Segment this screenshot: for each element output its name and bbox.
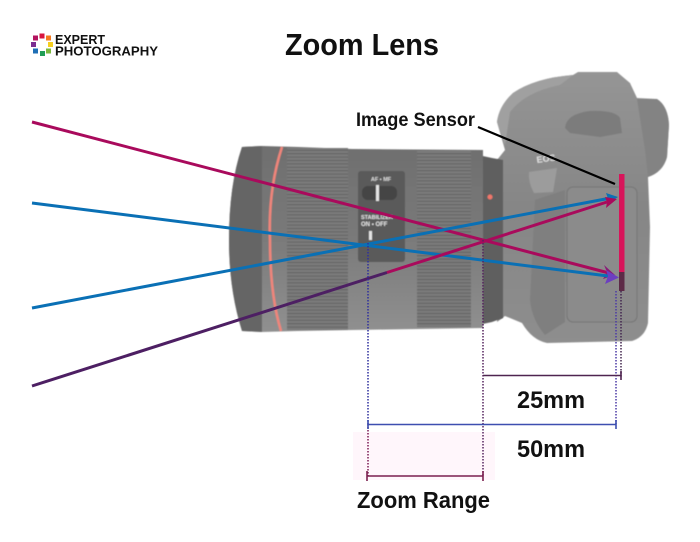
label: image sensor: Image Sensor — [356, 109, 475, 131]
camera door panel — [567, 187, 637, 322]
logo wordmark: EXPERT — [55, 33, 105, 47]
dimension: zoom range: Zoom Range — [357, 487, 490, 513]
camera body — [497, 72, 669, 343]
lens indicator dot — [488, 194, 492, 200]
camera top highlight — [497, 75, 573, 145]
ray: lower blue — [32, 193, 618, 308]
lens switch panel: ON ▪ OFF — [361, 222, 388, 228]
image sensor bar — [619, 174, 624, 291]
lens switch panel: AF ▪ MF — [371, 177, 392, 183]
ray: upper magenta — [32, 122, 615, 279]
lens zoom ring ribs — [287, 148, 348, 330]
camera eyecup — [637, 99, 669, 177]
dotted guide lines — [368, 240, 621, 476]
logo wordmark: PHOTOGRAPHY — [55, 44, 159, 58]
logo: Expert Photography — [31, 33, 159, 58]
lens barrel — [229, 146, 483, 332]
dimension: 50mm: 50mm — [517, 436, 585, 463]
dimension: 50mm — [368, 420, 616, 463]
dimension: 25mm — [483, 371, 621, 414]
pointer line to image sensor — [478, 127, 615, 184]
camera dial — [565, 111, 622, 137]
camera grip texture — [530, 190, 565, 335]
lens — [229, 146, 503, 332]
icon: colour ring — [31, 34, 53, 56]
title: Zoom Lens — [285, 27, 439, 62]
lens switch panel: STABILIZER — [361, 215, 393, 221]
camera brand: EOS — [536, 152, 556, 165]
lens red ring — [270, 147, 282, 331]
dimension: zoom range — [357, 471, 490, 513]
light rays — [32, 122, 619, 386]
logo wordmark — [55, 33, 159, 58]
lens front ring — [229, 146, 262, 332]
lens focus ring ribs — [417, 151, 471, 327]
ray: upper blue — [32, 203, 619, 284]
lens switch panel — [358, 171, 405, 262]
dimension: 25mm: 25mm — [517, 387, 585, 414]
lens mount — [478, 155, 503, 325]
ray: lower purple to magenta — [32, 197, 617, 386]
compression tint near zoom range — [353, 432, 495, 480]
camera badge — [529, 168, 557, 193]
